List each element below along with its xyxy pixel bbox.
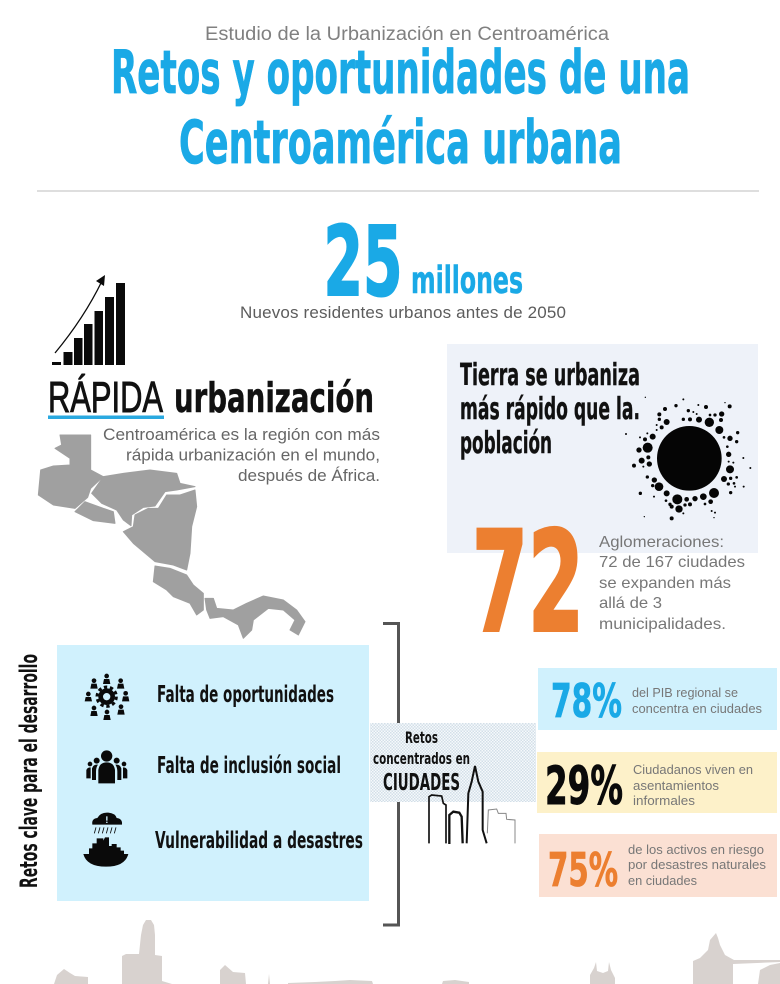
panel: key development challenges (57, 645, 369, 901)
stat card: 78% (538, 668, 777, 730)
word urbanización: urbanización (174, 374, 374, 422)
stat card: 78%: concentra en ciudades (632, 702, 762, 716)
label: challenges concentrated in cities (373, 728, 470, 796)
icon: expanding black blob (625, 397, 751, 520)
number 25: 25 (324, 206, 402, 318)
icon: people around gear (85, 674, 129, 720)
label: challenges concentrated in cities: concentrados en (373, 749, 470, 768)
stat card: 78%: del PIB regional se (632, 686, 738, 700)
stat card: 29%: 29% (545, 756, 623, 817)
challenge: lack of opportunities: Falta de oportunidades (157, 682, 334, 708)
skyline silhouette (54, 920, 780, 984)
text block: aglomeraciones (599, 534, 745, 633)
panel: land urbanizes faster (447, 344, 758, 553)
stat card: 75% (539, 834, 777, 897)
stat card: 75%: 75% (548, 843, 618, 897)
text block: region description: rápida urbanización en el mundo, (126, 446, 380, 464)
subtitle: Estudio de la Urbanización en Centroamérica (205, 24, 609, 45)
stat card: 75%: por desastres naturales (628, 858, 766, 872)
headline stat: 25 millones (240, 206, 566, 322)
panel heading: población (460, 426, 552, 461)
label: challenges concentrated in cities: Retos (405, 728, 438, 747)
icon: rising bar chart with arrow (52, 275, 125, 365)
text block: aglomeraciones: allá de 3 (599, 595, 662, 612)
panel heading (460, 358, 640, 461)
header (111, 24, 690, 178)
text block: aglomeraciones: se expanden más (599, 575, 731, 592)
stat caption: Nuevos residentes urbanos antes de 2050 (240, 303, 566, 322)
text block: aglomeraciones: municipalidades. (599, 616, 726, 633)
word RÁPIDA: RÁPIDA (48, 373, 163, 422)
vertical heading: Retos clave para el desarrollo (15, 654, 43, 888)
challenge: vulnerability to disasters: Vulnerabilidad a desastres (155, 828, 363, 854)
label: challenges concentrated in cities: CIUDADES (383, 770, 460, 796)
text block: region description: Centroamérica es la región con más (103, 425, 380, 444)
icon: storm over city (83, 813, 128, 867)
underline accent (48, 416, 164, 419)
stat card: 78%: 78% (551, 674, 622, 728)
icon: city outline (429, 766, 515, 844)
heading: rápida urbanización (48, 373, 374, 422)
text block: region description: después de África. (238, 466, 380, 485)
stat card: 29% (537, 752, 777, 817)
panel heading: Tierra se urbaniza (460, 358, 640, 393)
icon: group of people (86, 750, 127, 783)
stat card: 29%: informales (633, 794, 695, 808)
stat card: 29%: Ciudadanos viven en (633, 763, 753, 777)
text block: region description (103, 425, 380, 485)
bracket connector (383, 624, 398, 925)
challenge: lack of social inclusion: Falta de inclusión social (157, 753, 341, 779)
text block: aglomeraciones: 72 de 167 ciudades (599, 554, 745, 571)
stat card: 29%: asentamientos (633, 779, 719, 793)
stat card: 75%: de los activos en riesgo (628, 843, 764, 857)
unit millones: millones (411, 259, 523, 302)
text block: aglomeraciones: Aglomeraciones: (599, 534, 724, 551)
stat card: 75%: en ciudades (628, 874, 697, 888)
panel heading: más rápido que la. (460, 392, 640, 427)
map: Central America (38, 435, 305, 638)
number 72: 72 (472, 502, 584, 664)
panel: dotted band (370, 723, 536, 802)
